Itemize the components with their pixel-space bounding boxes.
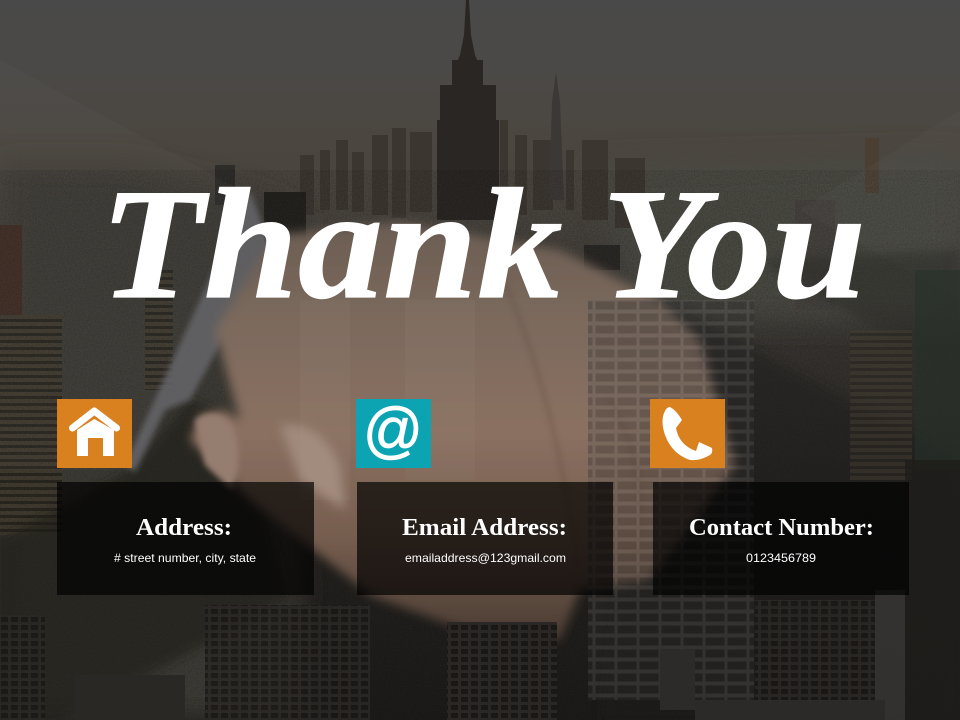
icon: at sign: @	[363, 396, 423, 465]
panel: email	[357, 482, 613, 595]
distant water right	[590, 155, 960, 320]
One World Trade Center	[549, 72, 564, 200]
Empire State Building	[437, 0, 499, 220]
dark suit right	[600, 300, 960, 720]
text: address value: # street number, city, state	[114, 551, 256, 565]
icon: phone	[650, 399, 725, 468]
hand	[190, 222, 735, 640]
card: contact	[650, 399, 909, 595]
heading: contact: Contact Number:	[689, 515, 874, 541]
icon: house	[57, 399, 132, 468]
text: contact value: 0123456789	[746, 551, 816, 565]
light X overlay corners	[0, 60, 250, 470]
fingers and knuckles	[195, 414, 238, 490]
panel: address	[57, 482, 314, 595]
panel: contact	[653, 482, 909, 595]
lower buildings	[205, 605, 370, 720]
text: email value: emailaddress@123gmail.com	[405, 551, 566, 565]
dark sleeve left	[0, 400, 290, 720]
heading: email: Email Address:	[402, 515, 567, 541]
distant city left	[0, 165, 300, 720]
heading: address: Address:	[136, 515, 232, 541]
card: address	[57, 399, 314, 595]
building over hand	[588, 300, 754, 700]
cuff	[125, 190, 272, 472]
grain on city	[0, 170, 960, 720]
card: email	[356, 396, 613, 595]
title: Thank You	[100, 157, 866, 332]
skyline	[300, 120, 645, 228]
